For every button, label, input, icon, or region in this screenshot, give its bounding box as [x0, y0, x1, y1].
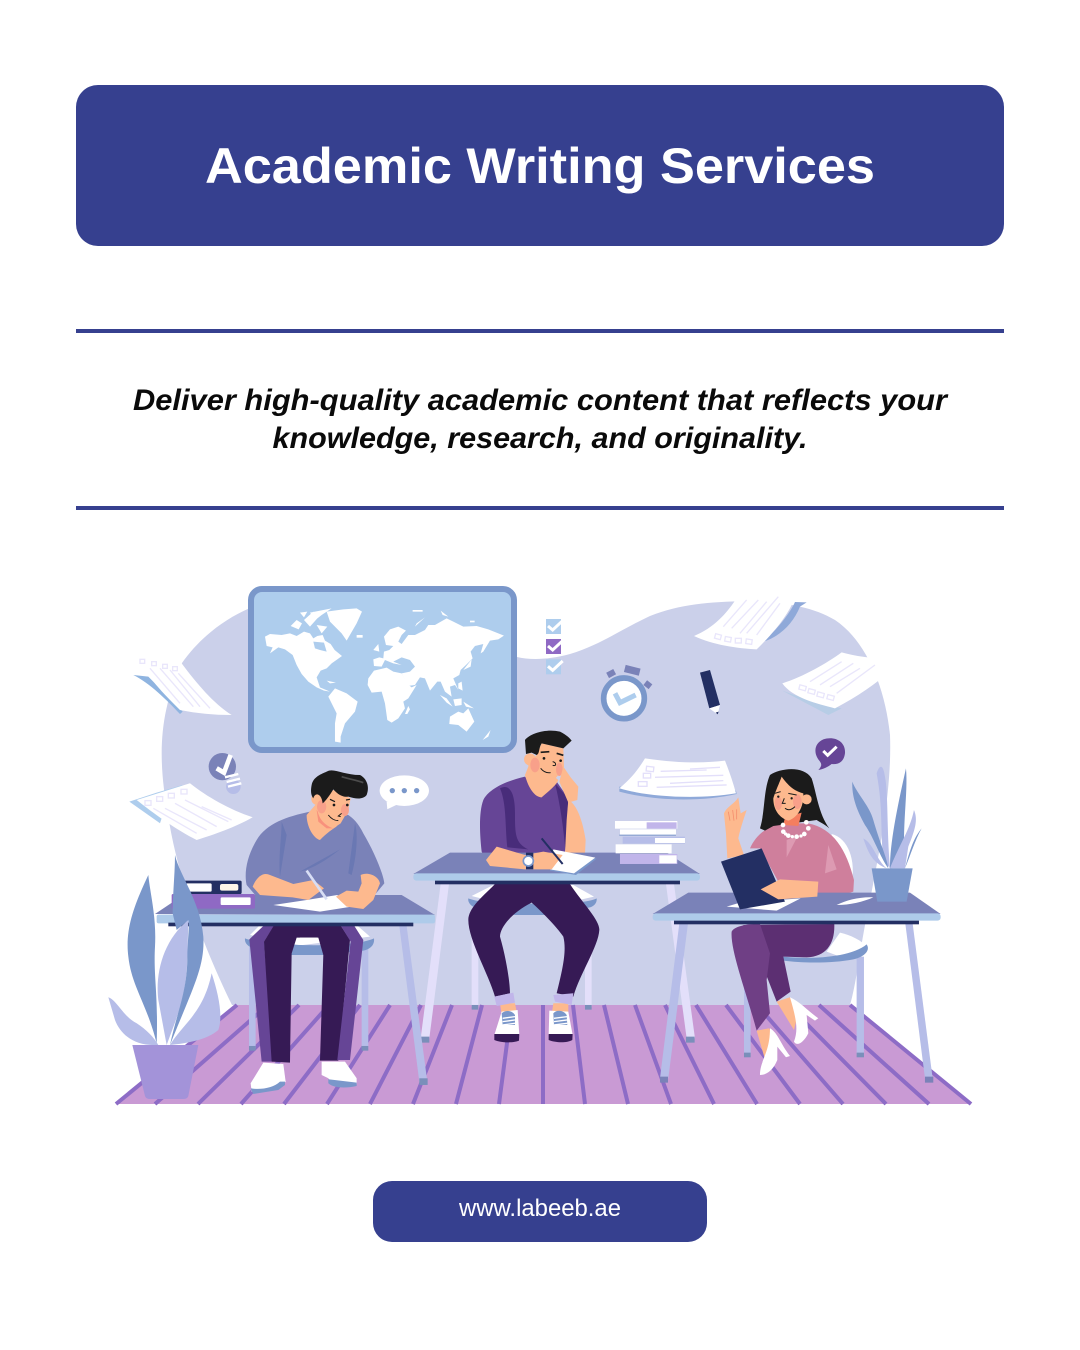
floating paper: top left — [133, 658, 232, 715]
binders — [172, 881, 255, 909]
tagline text: knowledge, research, and originality. — [272, 422, 808, 455]
background blob — [162, 601, 890, 1005]
desk legs — [660, 923, 933, 1083]
high heels and calves — [757, 997, 818, 1075]
head — [773, 777, 812, 826]
desk leg — [399, 926, 428, 1085]
head — [311, 770, 368, 828]
shoes — [251, 1062, 357, 1094]
potted plant: left — [108, 855, 220, 1099]
desk — [413, 853, 700, 884]
paper — [273, 895, 352, 912]
icon: checklist boxes — [546, 619, 563, 674]
tagline text: Deliver high-quality academic content that reflects your — [133, 384, 949, 417]
chair — [245, 925, 374, 1051]
raised hand — [724, 797, 747, 858]
shoes — [494, 1010, 573, 1042]
tagline text — [133, 384, 949, 455]
website url: www.labeeb.ae — [458, 1195, 621, 1222]
speech bubble with dots — [380, 775, 429, 809]
floating paper: lower left — [129, 783, 253, 840]
clipboard — [721, 848, 785, 909]
website pill — [373, 1181, 707, 1242]
paper and pen on desk — [727, 897, 873, 911]
forearm — [761, 879, 818, 899]
floor with stripes — [116, 1005, 971, 1104]
desk — [653, 893, 941, 924]
title: Academic Writing Services — [205, 138, 875, 194]
shirt — [480, 777, 568, 864]
pearl necklace — [781, 820, 811, 839]
shirt — [246, 812, 384, 897]
chair — [744, 834, 868, 1057]
person: left student at desk — [155, 770, 435, 1094]
world map — [251, 589, 514, 750]
icon: pencil — [700, 670, 720, 714]
paper, pen, forearm and watch — [486, 838, 597, 875]
person: middle student at desk — [413, 731, 700, 1043]
desk legs and chair — [421, 884, 695, 1043]
neck — [307, 803, 337, 840]
arms and pen — [253, 871, 380, 909]
person: woman at desk — [653, 767, 941, 1083]
plant on desk — [852, 767, 922, 902]
icon: light bulb with check — [209, 753, 241, 794]
icon: stopwatch — [604, 665, 652, 719]
trousers — [468, 884, 599, 997]
illustration: students writing in a classroom — [108, 589, 971, 1104]
title banner — [76, 85, 1004, 246]
icon: purple check speech bubble — [815, 738, 845, 770]
trousers — [249, 925, 363, 1063]
head — [524, 731, 572, 785]
floating paper: centre — [619, 758, 737, 799]
book stack — [615, 821, 685, 864]
neck — [525, 767, 558, 797]
cuffs and ankles — [494, 993, 573, 1015]
blouse — [750, 823, 854, 897]
desk — [155, 895, 435, 926]
floating paper: top right — [694, 596, 807, 649]
floating paper: right — [782, 652, 900, 715]
trousers — [732, 924, 834, 1031]
raised arm — [565, 800, 586, 854]
hair back — [760, 769, 829, 831]
